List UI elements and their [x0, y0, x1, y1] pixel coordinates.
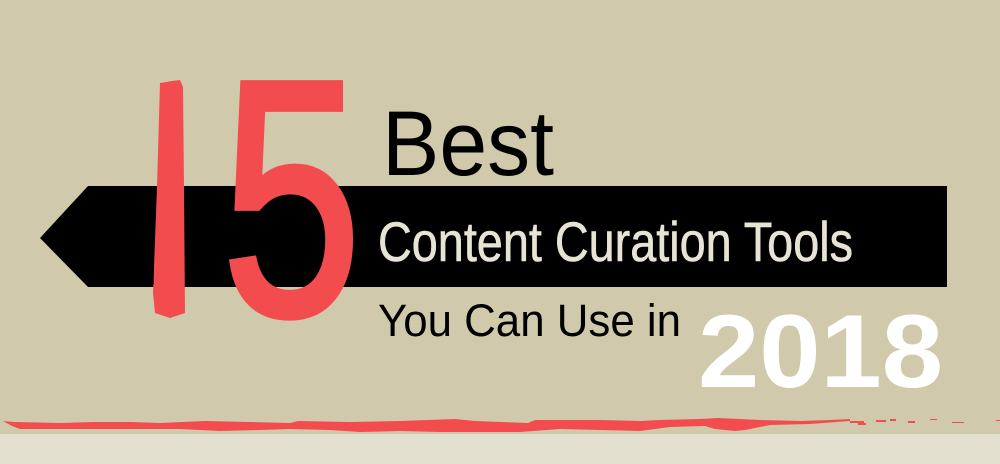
brush speckles	[850, 419, 1000, 425]
bottom pale strip	[0, 434, 1000, 464]
red brush stroke	[3, 418, 1000, 432]
black arrow banner	[40, 186, 947, 287]
heading: Best: Best	[382, 93, 554, 195]
red numeral 15	[153, 80, 354, 321]
heading: Content Curation Tools: Content Curation Tools	[378, 210, 853, 273]
numeral 1: 1	[100, 0, 228, 401]
numeral 5: 5	[222, 10, 361, 385]
subheading: You Can Use in: You Can Use in	[378, 295, 681, 346]
year: 2018: 2018	[698, 294, 943, 410]
